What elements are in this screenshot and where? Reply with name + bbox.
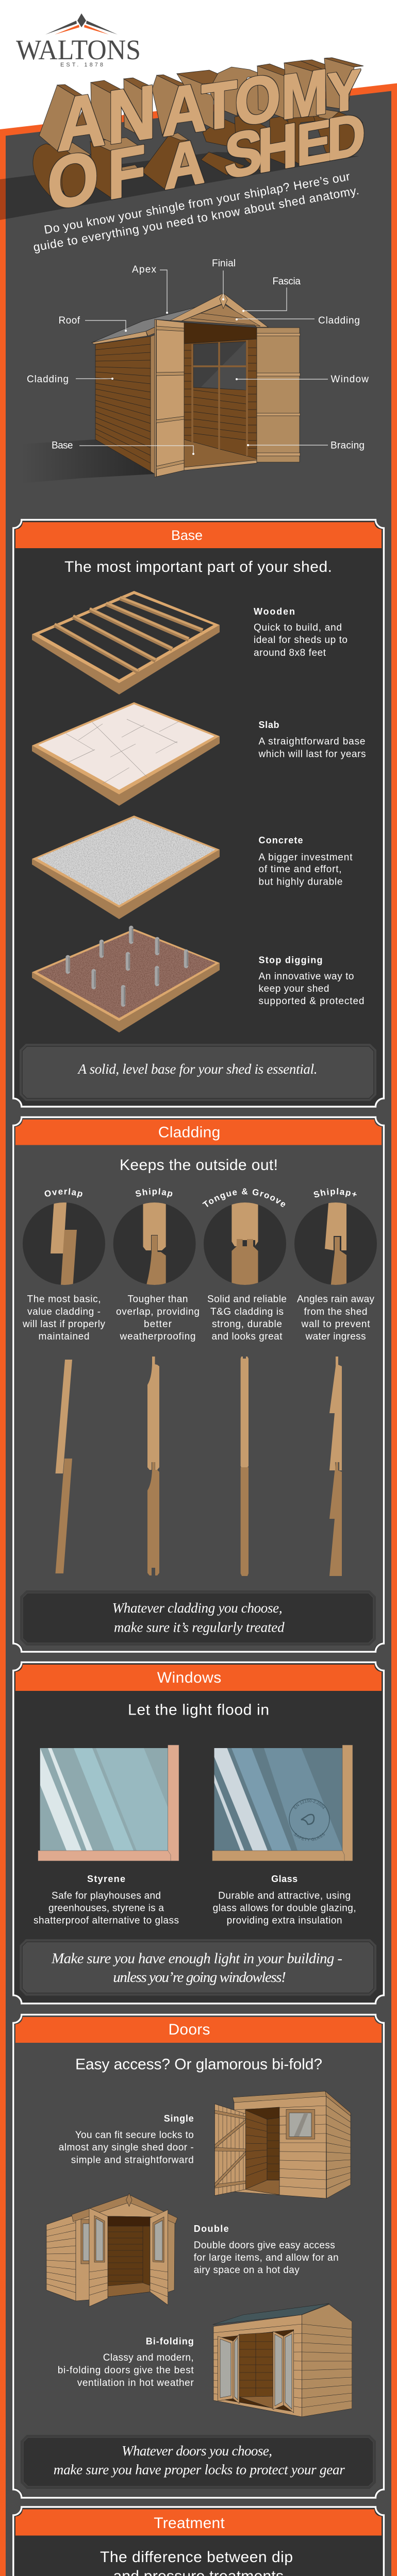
text: single door: You can fit secure locks to (75, 2130, 194, 2141)
wooden base illustration (32, 591, 220, 694)
heading: base: Base (171, 528, 203, 543)
cladding type: shiplap (113, 1188, 200, 1342)
logo: Waltons (16, 13, 141, 68)
title text: ANATOMY: T (202, 67, 237, 145)
cladding type: shiplap: weatherproofing (120, 1331, 196, 1342)
shed finial (220, 293, 227, 309)
cladding type: shiplap plus: Angles rain away (297, 1294, 374, 1304)
board profile: overlap (56, 1360, 72, 1573)
shed illustration: double door (46, 2193, 177, 2307)
shed interior (184, 323, 257, 470)
text: single door (59, 2113, 194, 2166)
shed labels and leader lines: Roof (59, 315, 80, 326)
wooden base text: Quick to build, and (254, 622, 342, 633)
panel frame: treatment (13, 2507, 384, 2576)
title text: OF A SHED: F (108, 131, 145, 214)
text: styrene: Styrene (87, 1874, 125, 1884)
text: bi-folding door: Bi-folding (146, 2336, 194, 2346)
shed labels and leader lines: Bracing (330, 440, 365, 451)
slab base text: Slab (259, 720, 279, 730)
shed labels and leader lines: Finial (212, 258, 236, 269)
title text: ANATOMY: O (235, 60, 280, 140)
text: glass: Durable and attractive, using (218, 1891, 351, 1902)
board profile: tongue and groove (241, 1357, 249, 1576)
safety glass stamp (289, 1798, 330, 1841)
window illustration: styrene (38, 1745, 179, 1861)
shed labels and leader lines: Window (331, 374, 369, 385)
callout: cladding: Whatever cladding you choose, (112, 1600, 283, 1616)
heading: cladding (15, 1120, 382, 1145)
text: styrene: greenhouses, styrene is a (48, 1903, 164, 1914)
shed labels and leader lines: Apex (132, 264, 157, 275)
panel frame: doors (13, 2014, 384, 2498)
cladding type: shiplap: overlap, providing (116, 1307, 200, 1317)
slab base text: A straightforward base (259, 736, 365, 747)
panel: windows (12, 1661, 385, 2004)
stop digging text: supported & protected (259, 996, 364, 1007)
callout: doors: make sure you have proper locks to protect your gear (54, 2462, 345, 2477)
stop digging text (259, 955, 364, 1007)
shed labels and leader lines: Base (52, 440, 73, 451)
shed labels and leader lines: Cladding (27, 374, 69, 385)
panel frame: base (13, 520, 384, 1107)
title text: ANATOMY: A (162, 69, 207, 150)
board profile: shiplap plus (329, 1357, 342, 1576)
cladding type: overlap: The most basic, (27, 1294, 101, 1304)
callout: windows: Make sure you have enough light in your building - (51, 1951, 342, 1967)
shed illustration: bi-folding door (213, 2303, 352, 2417)
subheading: windows: Let the light flood in (128, 1702, 269, 1719)
title text: ANATOMY: A (57, 77, 106, 167)
cladding type: shiplap plus: Shiplap+ (313, 1188, 357, 1197)
text: styrene: shatterproof alternative to glass (34, 1916, 179, 1926)
text: double door: airy space on a hot day (194, 2265, 300, 2276)
concrete base text: A bigger investment (259, 852, 353, 863)
cladding type: tongue and groove: and looks great (211, 1331, 283, 1342)
title text: OF A SHED: D (327, 101, 366, 173)
subheading: base: The most important part of your shed. (64, 558, 332, 575)
stop digging base illustration (32, 928, 220, 1032)
heading: cladding: Cladding (158, 1124, 220, 1141)
heading: windows: Windows (157, 1669, 221, 1686)
cladding type: shiplap: Tougher than (128, 1294, 188, 1304)
callout: windows: unless you’re going windowless! (113, 1969, 286, 1986)
text: styrene (34, 1874, 179, 1926)
shed illustration: single door (214, 2091, 351, 2198)
text: styrene: Safe for playhouses and (52, 1891, 161, 1902)
heading: doors (15, 2017, 382, 2043)
cladding type: shiplap plus: from the shed (304, 1307, 367, 1317)
text: glass: Glass (271, 1874, 297, 1884)
cladding type: tongue and groove: strong, durable (212, 1319, 282, 1330)
text: double door (194, 2224, 339, 2276)
text: glass (213, 1874, 356, 1926)
text: double door: for large items, and allow for an (194, 2252, 339, 2263)
callout: base (20, 1044, 376, 1101)
heading: doors: Doors (168, 2021, 210, 2038)
stop digging text: Stop digging (259, 955, 323, 965)
heading: windows (15, 1665, 382, 1691)
text: double door: Double doors give easy access (194, 2240, 335, 2251)
subheading: doors: Easy access? Or glamorous bi-fold? (75, 2056, 322, 2073)
shed left wall (95, 335, 155, 474)
text: double door: Double (194, 2224, 229, 2234)
text: glass: providing extra insulation (227, 1916, 342, 1926)
shed diagram (21, 293, 300, 483)
callout: doors (21, 2435, 376, 2489)
concrete base text (259, 835, 353, 887)
cladding type: shiplap: Shiplap (135, 1188, 172, 1198)
title extrusion: second line blocks (33, 110, 362, 203)
logo: Waltons: WALTONS (16, 34, 141, 65)
safety glass stamp: EN 12150-2:2004 (294, 1799, 325, 1809)
cladding type: overlap (22, 1188, 105, 1342)
text: bi-folding door: ventilation in hot weather (77, 2378, 194, 2388)
wooden base text (254, 606, 348, 658)
cladding type: tongue and groove: T&G cladding is (210, 1307, 284, 1317)
concrete base text: Concrete (259, 835, 303, 845)
board profile: shiplap (147, 1357, 159, 1575)
subheading: cladding: Keeps the outside out! (120, 1157, 278, 1174)
shed labels and leader lines: Cladding (318, 315, 360, 326)
shed right door (257, 328, 300, 462)
title text: OF A SHED: S (225, 115, 262, 192)
cladding type: overlap: will last if properly (22, 1319, 105, 1330)
title text: OF A SHED: E (296, 108, 331, 178)
shed labels and leader lines: Fascia (272, 276, 301, 287)
callout: windows (20, 1939, 376, 1996)
cladding type: overlap: maintained (38, 1331, 90, 1342)
text: glass: glass allows for double glazing, (213, 1903, 356, 1914)
concrete base illustration (32, 816, 220, 919)
intro text: guide to everything you need to know about shed anatomy. (32, 183, 360, 254)
wooden base text: Wooden (254, 606, 295, 617)
slab base illustration (32, 702, 220, 806)
shed shadow (21, 439, 155, 483)
heading: treatment (15, 2509, 382, 2536)
cladding type: shiplap plus: water ingress (305, 1331, 366, 1342)
safety glass stamp: SAFETY GLASS (294, 1833, 325, 1841)
intro text: Do you know your shingle from your shiplap? Here’s our (43, 170, 351, 236)
subheading: treatment: The difference between dip (100, 2549, 293, 2566)
panel: doors (13, 2014, 384, 2498)
text: bi-folding door (58, 2336, 194, 2388)
concrete base text: but highly durable (259, 877, 342, 887)
title: Anatomy of a shed 3D lettering (33, 40, 366, 226)
callout: doors: Whatever doors you choose, (122, 2443, 272, 2459)
cladding type: tongue and groove (202, 1188, 287, 1342)
callout: cladding (20, 1590, 376, 1646)
title text: OF A SHED: O (47, 135, 98, 226)
text: bi-folding door: bi-folding doors give the best (58, 2365, 194, 2376)
heading: treatment: Treatment (154, 2515, 225, 2532)
title text: ANATOMY: Y (327, 58, 361, 125)
text: bi-folding door: Classy and modern, (103, 2352, 194, 2363)
cladding type: overlap: Overlap (44, 1188, 82, 1198)
subheading: treatment (100, 2549, 293, 2576)
text: single door: Single (164, 2113, 194, 2124)
shed left door (155, 319, 184, 477)
logo: Waltons: EST. 1878 (60, 62, 103, 68)
cladding type: tongue and groove: Solid and reliable (207, 1294, 287, 1304)
title text: OF A SHED: A (164, 125, 205, 202)
callout: base: A solid, level base for your shed is essential. (77, 1061, 318, 1077)
wooden base text: ideal for sheds up to (254, 635, 348, 646)
panel frame: windows (13, 1662, 384, 2004)
slab base text (258, 720, 366, 759)
title text: ANATOMY: M (281, 55, 328, 133)
concrete base text: of time and effort, (259, 864, 341, 875)
wooden base text: around 8x8 feet (254, 648, 326, 658)
window illustration: glass (212, 1744, 353, 1861)
title text: ANATOMY: N (107, 69, 156, 160)
cladding type: shiplap plus (294, 1188, 377, 1342)
slab base text: which will last for years (258, 749, 366, 759)
shed roof (92, 293, 268, 344)
stop digging text: keep your shed (259, 984, 329, 994)
cladding type: shiplap: better (144, 1319, 172, 1330)
cladding type: shiplap plus: wall to prevent (301, 1319, 370, 1330)
stop digging text: An innovative way to (259, 971, 354, 982)
panel: base (13, 520, 384, 1107)
text: single door: simple and straightforward (71, 2155, 194, 2166)
panel: treatment (13, 2507, 384, 2576)
shed labels and leader lines (27, 258, 369, 455)
cladding type: overlap: value cladding - (27, 1307, 101, 1317)
title extrusion: first line blocks (39, 58, 363, 151)
callout: cladding: make sure it’s regularly treated (114, 1620, 285, 1635)
panel: cladding (12, 1116, 385, 1653)
shed window (192, 340, 247, 456)
panel frame: cladding (13, 1117, 384, 1652)
text: single door: almost any single shed door - (59, 2142, 194, 2153)
heading: base (15, 522, 382, 548)
cladding type: tongue and groove: Tongue & Groove (202, 1188, 286, 1207)
title text: OF A SHED: H (258, 110, 297, 186)
